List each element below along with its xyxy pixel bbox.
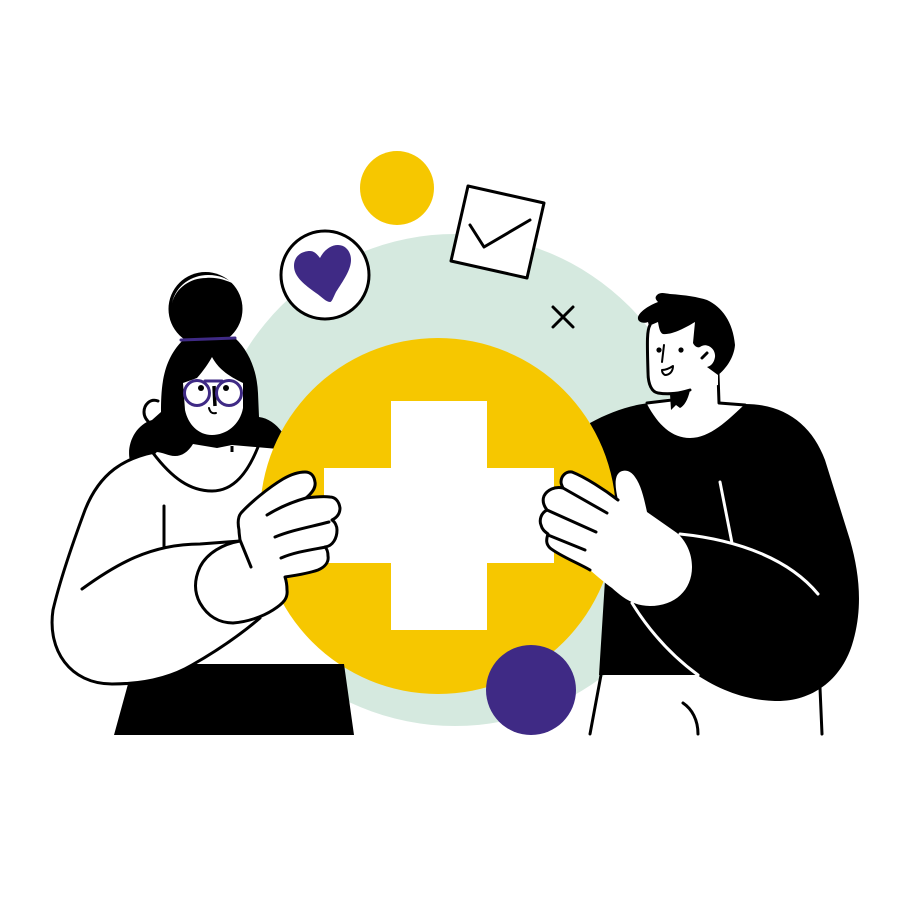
collar tick: [230, 446, 234, 452]
beard: [670, 390, 690, 410]
facial features: [656, 345, 684, 375]
large yellow circle: [260, 338, 616, 694]
background circle: pale green: [209, 234, 701, 726]
face: [648, 322, 718, 394]
icon: checkbox: [451, 186, 544, 278]
glasses: [184, 380, 242, 406]
sweater neckline: [153, 447, 258, 491]
purple circle: [486, 645, 576, 735]
torso and sleeve: [585, 403, 859, 701]
man's hand: [540, 471, 692, 606]
icon: heart badge: [281, 231, 369, 319]
small yellow circle: [360, 151, 434, 225]
pant lines: [590, 675, 822, 734]
sweater outline: [52, 452, 260, 684]
hair: [129, 338, 290, 461]
hair: [638, 293, 735, 376]
sweater fold lines: [82, 506, 240, 589]
hair band: [181, 338, 235, 340]
facial features: [198, 385, 229, 413]
face outline: [647, 325, 690, 394]
woman's skirt: [114, 664, 354, 735]
person: woman upper body and head: [52, 272, 345, 684]
sweater body: [52, 440, 345, 684]
ear line: [702, 353, 707, 358]
person: man body and head: [585, 293, 859, 734]
neck outline: [647, 374, 745, 405]
face: [183, 357, 243, 435]
woman's hand: [196, 472, 340, 623]
collar and neck: [647, 372, 743, 438]
hair bun: [168, 272, 242, 346]
icon: x mark: [553, 307, 573, 327]
small hair curl: [144, 400, 158, 424]
jacket fold lines: [632, 482, 818, 675]
white medical cross: [324, 401, 554, 630]
